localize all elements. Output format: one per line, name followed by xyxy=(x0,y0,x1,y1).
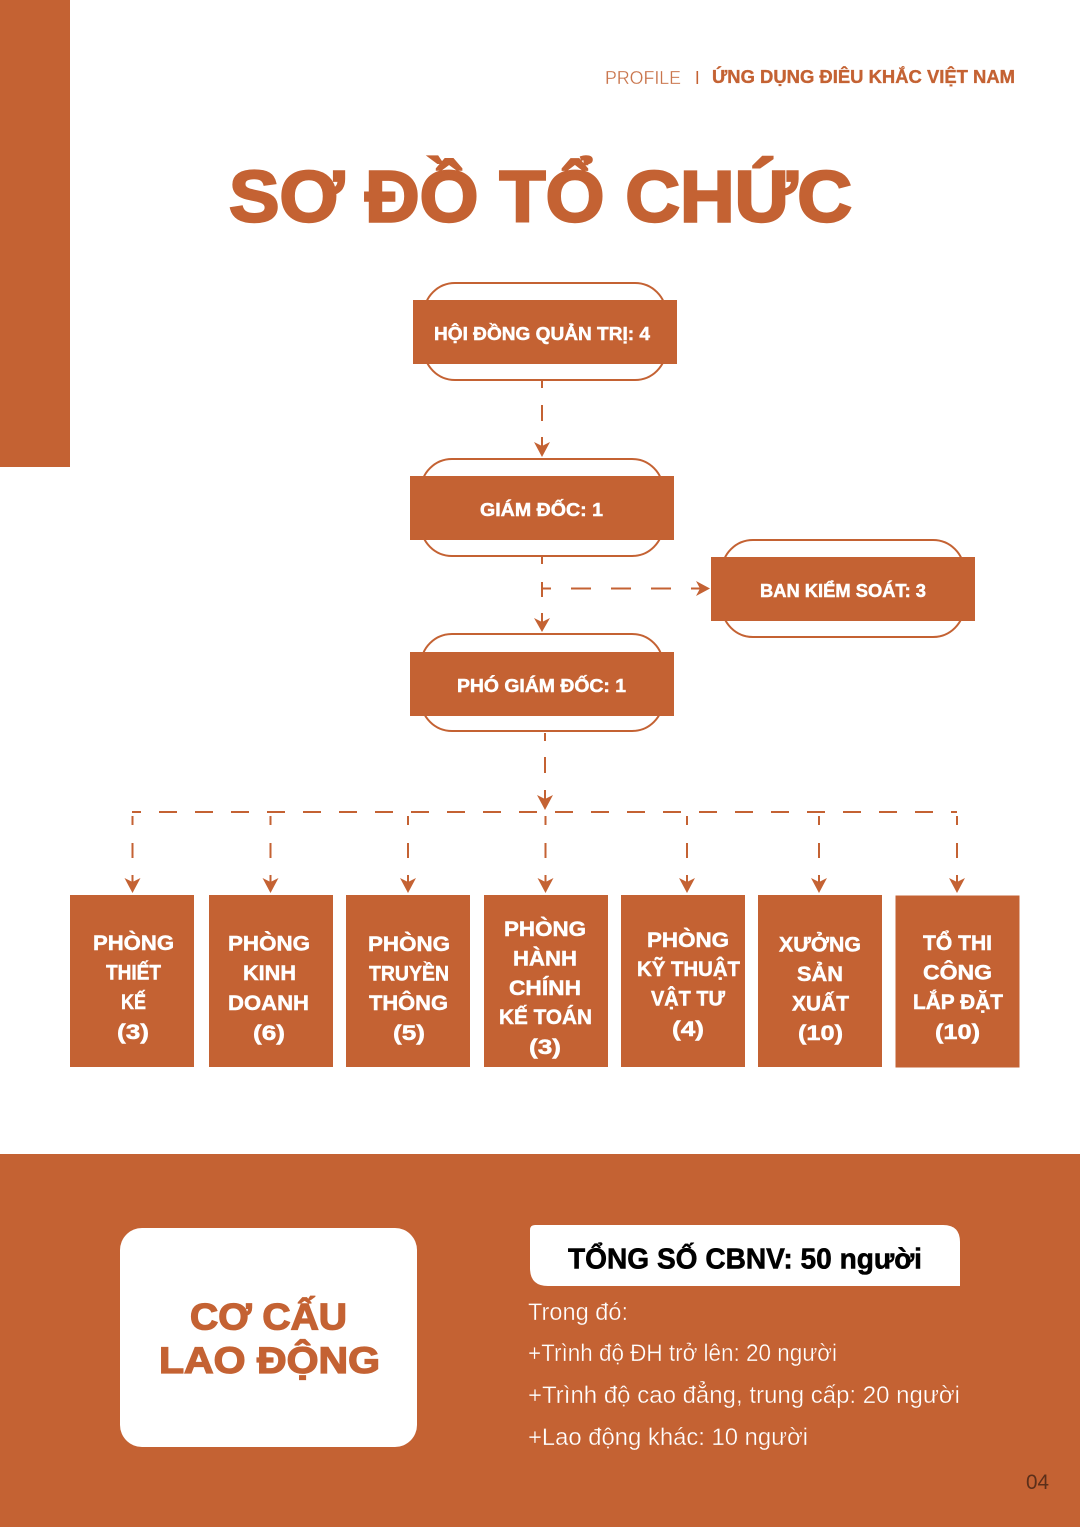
department: installation team: CÔNG xyxy=(923,960,992,984)
arrow: director to supervisory board xyxy=(542,581,710,596)
panel: labour structure band xyxy=(0,1154,1080,1527)
department: production workshop xyxy=(758,895,882,1067)
org node: board of directors: HỘI ĐỒNG QUẢN TRỊ: 4 xyxy=(434,323,651,344)
title: SƠ ĐỒ TỔ CHỨC xyxy=(229,156,852,238)
department: communications: TRUYỀN xyxy=(369,960,449,986)
header text xyxy=(605,66,1015,88)
department: design: (3) xyxy=(117,1020,149,1044)
arrow: board to director xyxy=(534,380,550,457)
department: sales: KINH xyxy=(243,961,296,985)
employee breakdown list: +Trình độ cao đẳng, trung cấp: 20 người xyxy=(528,1380,960,1409)
org node: director: GIÁM ĐỐC: 1 xyxy=(480,499,603,520)
labour structure heading card xyxy=(120,1228,417,1447)
department: admin and accounting: PHÒNG xyxy=(504,916,586,941)
department: engineering and materials: PHÒNG xyxy=(647,927,729,952)
department: engineering and materials xyxy=(621,895,745,1067)
header text: PROFILE xyxy=(605,68,681,88)
employee breakdown list: +Trình độ ĐH trở lên: 20 người xyxy=(528,1340,837,1367)
department: sales xyxy=(209,895,333,1067)
arrow: deputy director to departments xyxy=(537,733,553,810)
department: sales: PHÒNG xyxy=(228,930,310,956)
department: installation team: TỔ THI xyxy=(923,930,992,955)
department: admin and accounting: HÀNH xyxy=(513,946,577,970)
department: production workshop: (10) xyxy=(798,1021,843,1045)
department: production workshop: XUẤT xyxy=(792,990,849,1016)
org node: deputy director xyxy=(410,634,674,731)
org node: director xyxy=(410,459,674,556)
department: sales: DOANH xyxy=(228,991,309,1015)
connector: department distribution lines xyxy=(124,812,965,893)
org node: deputy director: PHÓ GIÁM ĐỐC: 1 xyxy=(457,675,626,696)
department: communications: THÔNG xyxy=(369,990,448,1015)
org node: supervisory board xyxy=(711,540,975,637)
org node: supervisory board: BAN KIỂM SOÁT: 3 xyxy=(760,580,926,601)
labour structure heading card: CƠ CẤU xyxy=(190,1296,347,1338)
department: admin and accounting: (3) xyxy=(529,1035,561,1059)
total employees badge: TỔNG SỐ CBNV: 50 người xyxy=(568,1242,922,1276)
total employees badge xyxy=(530,1225,960,1286)
org node: board of directors xyxy=(413,283,677,380)
department: design: KẾ xyxy=(121,989,146,1014)
page number: 04 xyxy=(1026,1471,1049,1494)
decorative side bar xyxy=(0,0,70,467)
employee breakdown list: Trong đó: xyxy=(528,1299,628,1326)
department: installation team: LẮP ĐẶT xyxy=(913,989,1003,1014)
department: design: THIẾT xyxy=(106,960,161,984)
department: admin and accounting: CHÍNH xyxy=(509,975,581,1000)
department: engineering and materials: KỸ THUẬT xyxy=(637,956,740,981)
labour structure heading card: LAO ĐỘNG xyxy=(159,1339,380,1381)
employee breakdown list: +Lao động khác: 10 người xyxy=(528,1424,808,1451)
department: engineering and materials: VẬT TƯ xyxy=(651,986,725,1010)
arrow: director to deputy director xyxy=(534,556,550,632)
department: production workshop: XƯỞNG xyxy=(779,932,861,956)
department: design xyxy=(70,895,194,1067)
employee breakdown list xyxy=(528,1299,960,1451)
department: installation team: (10) xyxy=(935,1020,980,1044)
department: engineering and materials: (4) xyxy=(672,1017,704,1041)
department: communications xyxy=(346,895,470,1067)
department: production workshop: SẢN xyxy=(797,961,843,986)
department: admin and accounting xyxy=(484,895,608,1067)
department: communications: (5) xyxy=(393,1021,425,1045)
header text: ỨNG DỤNG ĐIÊU KHẮC VIỆT NAM xyxy=(712,66,1015,87)
department: installation team xyxy=(896,896,1020,1068)
department: design: PHÒNG xyxy=(93,930,174,955)
department: communications: PHÒNG xyxy=(368,931,450,956)
department: sales: (6) xyxy=(253,1021,285,1045)
department: admin and accounting: KẾ TOÁN xyxy=(499,1004,592,1029)
